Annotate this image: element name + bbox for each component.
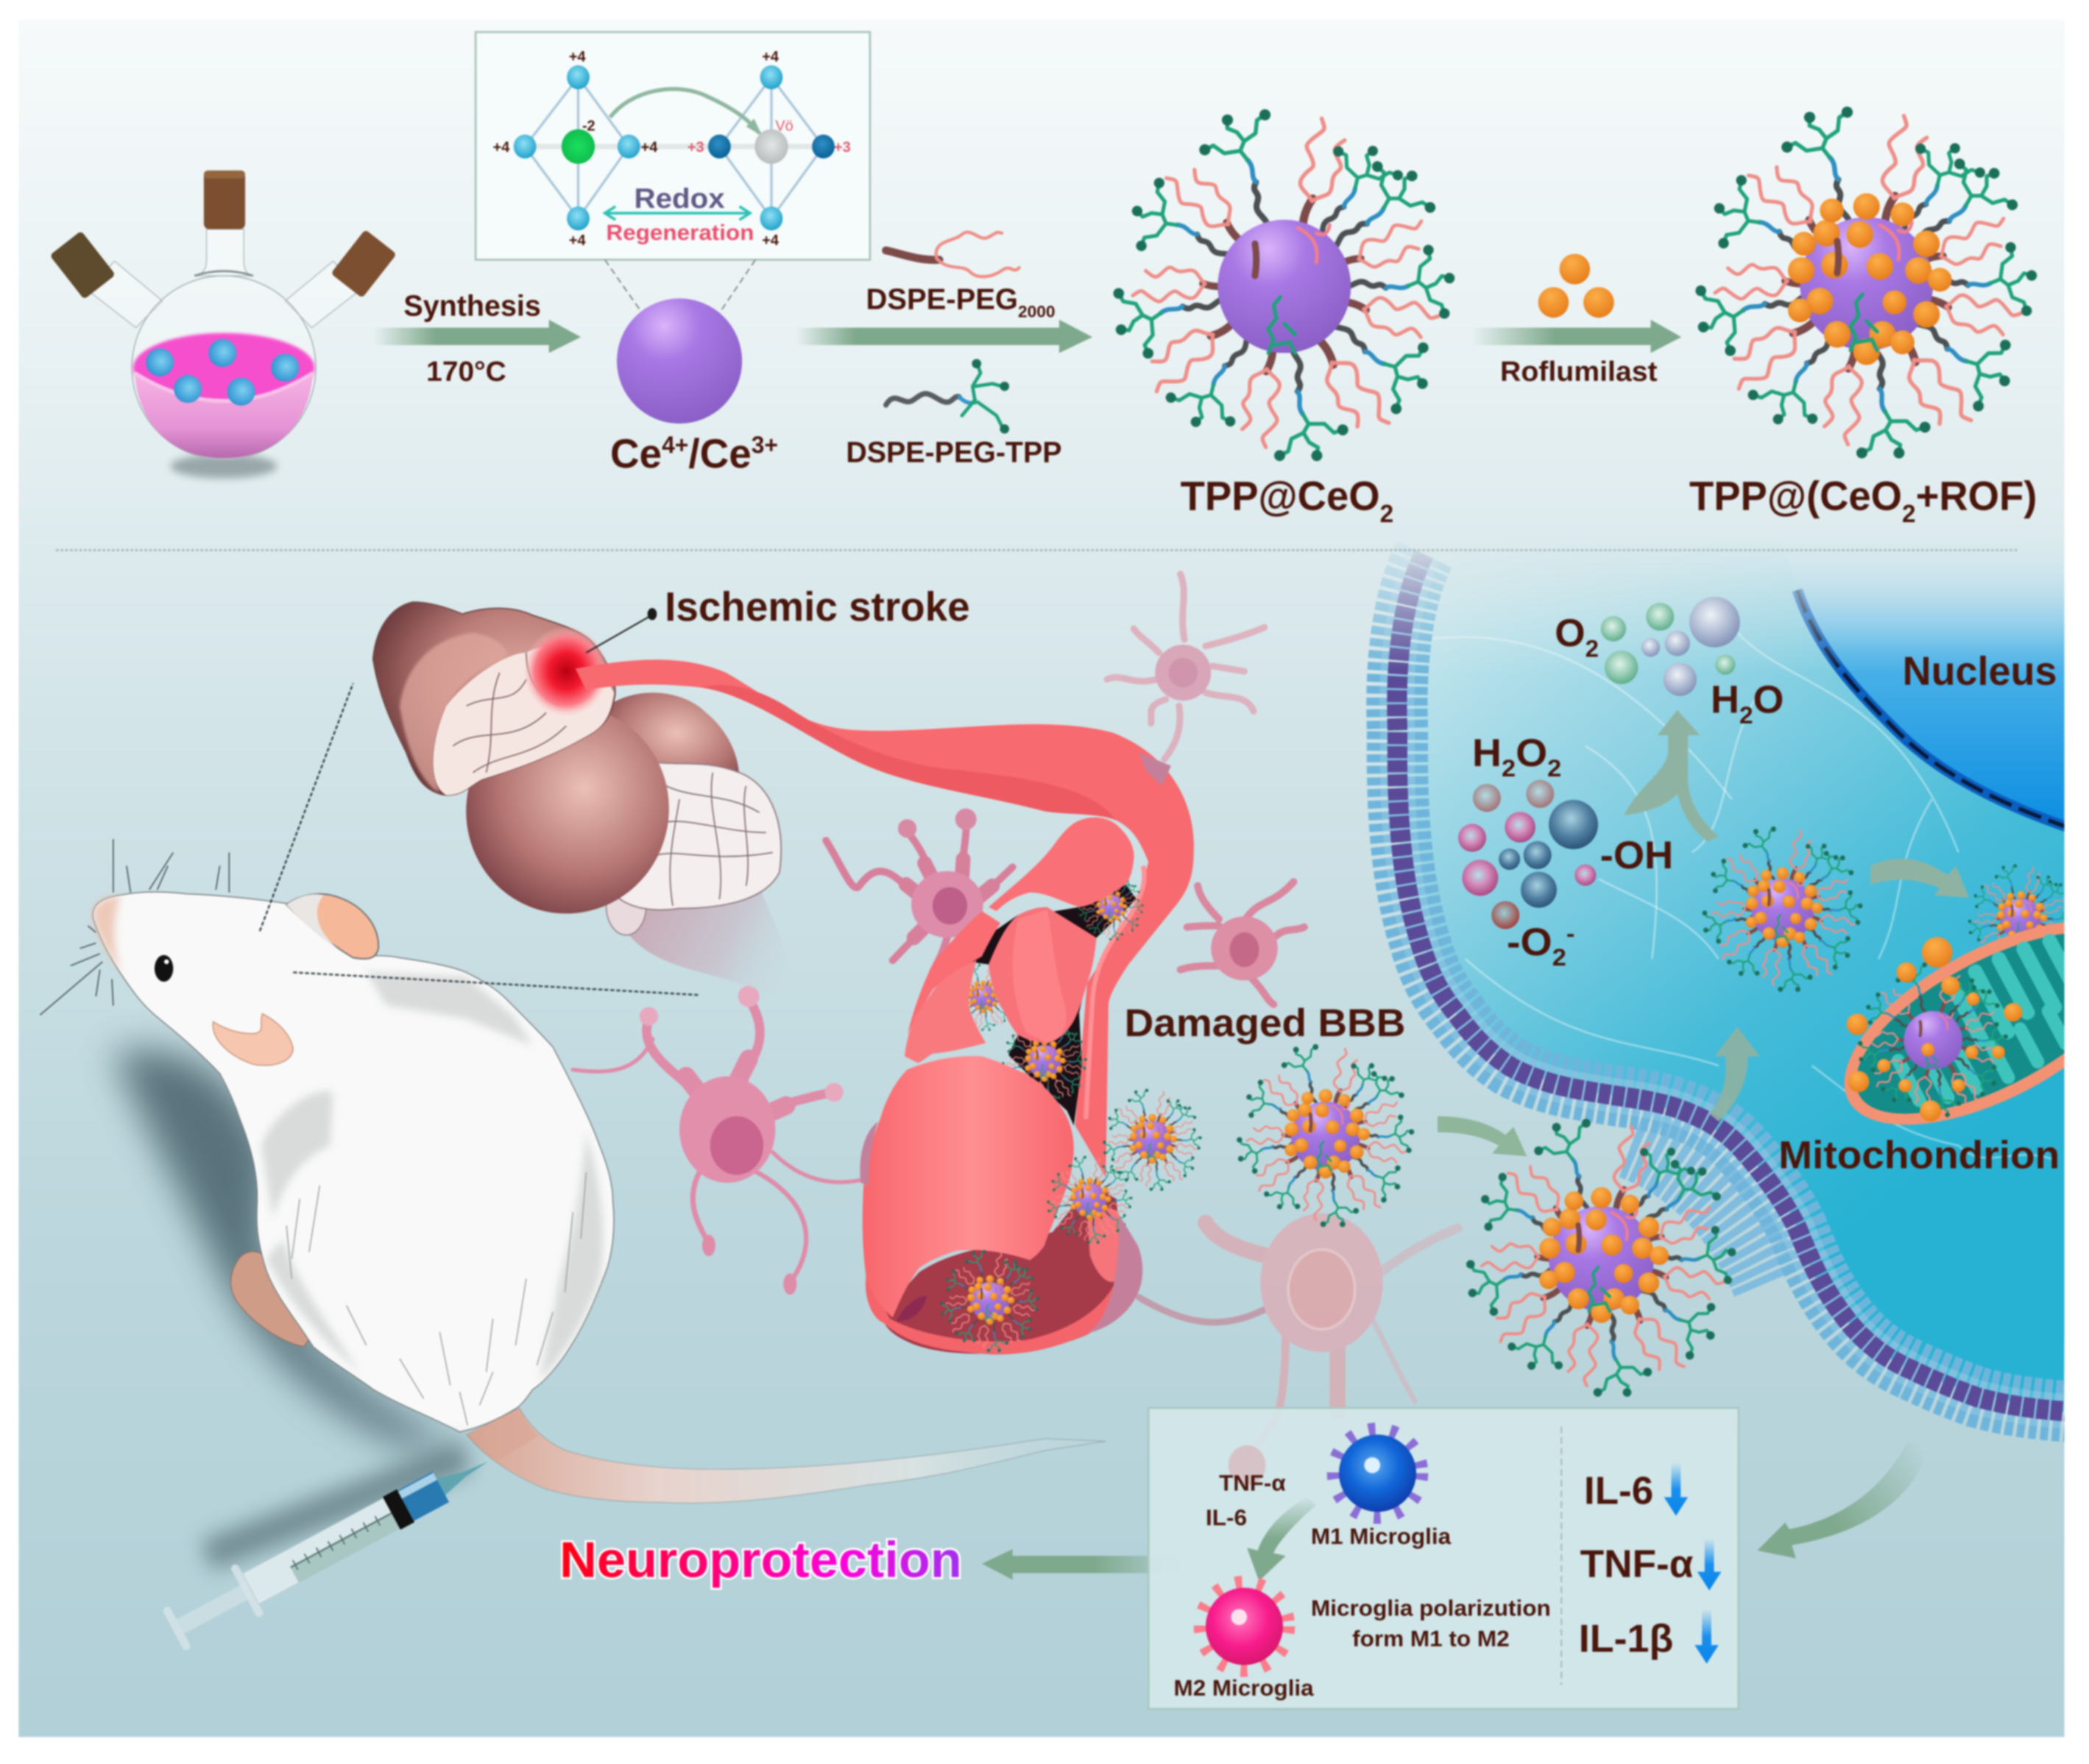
label: Synthesis: Synthesis <box>403 290 541 322</box>
upper plate <box>989 818 1134 911</box>
cortex white area <box>434 647 614 796</box>
arrow: M1 to M2 <box>1247 1497 1316 1581</box>
fur strokes <box>286 1172 586 1425</box>
cell E: large faded microglia <box>1139 1214 1457 1459</box>
nanoparticle: TPP@CeO2 <box>1106 102 1456 468</box>
label: DSPE-PEG2000: 2000 <box>1018 302 1055 321</box>
molecules: reactive oxygen species <box>1458 780 1598 929</box>
label: TPP@CeO2: 2 <box>1380 500 1393 528</box>
label: TPP@(CeO2+ROF): 2 <box>1902 500 1916 528</box>
arrow: up into cytosol <box>1709 1027 1760 1122</box>
eye <box>155 955 173 982</box>
astrocyte feet <box>860 753 1171 1333</box>
label: H2O2: 2 <box>1502 755 1516 782</box>
cell C: faded microglia <box>1107 574 1265 759</box>
flask with nanoparticles <box>49 171 397 478</box>
inset panel: redox: +4 <box>641 139 657 155</box>
lumen fold <box>897 1296 927 1322</box>
brainstem <box>613 852 796 993</box>
inset panel: redox: +3 <box>688 139 704 155</box>
icon: DSPE-PEG2000 <box>886 232 1019 277</box>
panel: microglia polarization <box>1148 1408 1739 1709</box>
small particles in gaps <box>950 963 1016 1032</box>
arrow: TNF-α down <box>1697 1539 1721 1590</box>
label: M1 Microglia: M1 Microglia <box>1311 1523 1452 1549</box>
arrow: ROS to O2/H2O <box>1624 710 1719 842</box>
fur shade <box>261 972 603 1381</box>
label: TNF-α: TNF-α <box>1580 1542 1693 1586</box>
label: Neuroprotection: Neuroprotection <box>559 1531 962 1588</box>
rat shadow <box>113 1049 459 1452</box>
label: H2O2: H <box>1472 732 1500 775</box>
cerebellum bulb <box>607 876 646 935</box>
nanoparticle: by mitochondrion <box>1967 863 2065 944</box>
arrow: roflumilast <box>1471 319 1681 353</box>
nose <box>93 895 123 975</box>
syringe <box>159 1436 502 1657</box>
rat <box>40 839 1106 1503</box>
label: -O2-: -O <box>1507 921 1549 964</box>
faded cell process over panel <box>1229 1445 1265 1485</box>
zoom line: top <box>260 684 353 931</box>
lower band <box>699 685 1117 821</box>
arrow: into membrane <box>1438 1116 1527 1156</box>
label: Damaged BBB: Damaged BBB <box>1125 1002 1405 1045</box>
callout line: ischemic stroke <box>586 608 657 653</box>
icon: DSPE-PEG-TPP <box>886 359 1009 433</box>
roflumilast molecules <box>1538 254 1614 318</box>
label: 170C: 170°C <box>426 357 506 388</box>
ear <box>286 894 378 959</box>
particle in lumen <box>939 1247 1039 1354</box>
particle at breach <box>1045 1154 1133 1246</box>
label: Ce4+/Ce3+: 4+ <box>662 431 688 458</box>
label: -O2-: - <box>1566 921 1574 947</box>
divider <box>56 550 2018 551</box>
arrow: PEG assembly <box>796 319 1092 353</box>
inset panel: redox: +4 <box>762 233 779 249</box>
molecules: O2 and H2O <box>1601 597 1740 696</box>
label: DSPE-PEG2000: DSPE-PEG <box>866 283 1017 316</box>
inset panel: redox: -2 <box>582 118 595 134</box>
label: polarization caption: Microglia polarizution <box>1311 1595 1551 1621</box>
body <box>93 892 614 1432</box>
label: Ce4+/Ce3+: /Ce <box>688 430 752 476</box>
outer rim <box>866 1265 1122 1355</box>
brain <box>373 602 796 993</box>
cell interior and membrane <box>1396 533 2071 1412</box>
label: IL-1β: IL-1β <box>1579 1617 1673 1660</box>
arrow: to neuroprotection <box>982 1549 1184 1580</box>
cerebrum big <box>443 684 692 936</box>
inset panel: redox: +4 <box>569 233 586 249</box>
arrow: synthesis <box>373 319 581 353</box>
label: TPP@(CeO2+ROF): TPP@(CeO <box>1689 472 1909 519</box>
rear lobe <box>599 693 740 799</box>
front paw <box>213 1013 293 1066</box>
inset panel: redox <box>476 32 870 260</box>
CeO2 sphere <box>617 298 742 424</box>
label: Roflumilast: Roflumilast <box>1500 357 1658 388</box>
arrow: cell to cytokines <box>1757 1441 1929 1559</box>
dark gaps <box>969 885 1137 1125</box>
cerebellum <box>613 762 781 910</box>
lumen <box>883 1186 1122 1354</box>
label: TPP@CeO2: TPP@CeO <box>1181 472 1386 519</box>
stroke lesion <box>523 626 609 717</box>
whiskers <box>40 839 229 1015</box>
icon: M2 microglia <box>1202 1584 1287 1669</box>
arrow: towards mitochondrion <box>1870 859 1969 898</box>
cell B: microglia <box>826 809 1013 972</box>
label: M2 Microglia: M2 Microglia <box>1174 1675 1315 1701</box>
inset panel: redox: Vö <box>775 118 793 134</box>
nanoparticle: small outside vessel <box>1100 1086 1202 1193</box>
right stub <box>1087 1208 1119 1282</box>
nanoparticle: damaged BBB <box>1233 1040 1415 1230</box>
label: H2O2: 2 <box>1547 755 1561 782</box>
label: Ce4+/Ce3+: 3+ <box>752 431 778 458</box>
tail base <box>466 1408 538 1462</box>
label: O2: 2 <box>1586 635 1599 662</box>
left upper plate <box>908 911 1000 1035</box>
label: IL-6: IL-6 <box>1584 1469 1653 1512</box>
label: H2O: 2 <box>1739 702 1753 729</box>
left plate <box>905 960 986 1063</box>
label: TPP@(CeO2+ROF): +ROF) <box>1916 472 2037 519</box>
tail <box>466 1408 1106 1503</box>
cell A: microglia <box>573 985 866 1294</box>
left lobe highlight <box>400 633 506 793</box>
feeding vessel and bend <box>576 659 1194 1177</box>
label: Mitochondrion: Mitochondrion <box>1778 1133 2060 1177</box>
zoom lines <box>605 260 755 313</box>
label: -O2-: 2 <box>1552 944 1566 971</box>
inset panel: redox: Regeneration <box>607 221 754 245</box>
syringe shadow <box>207 1456 466 1556</box>
label: Nucleus: Nucleus <box>1903 648 2057 693</box>
inset panel: redox: +4 <box>493 139 509 155</box>
label: -OH: -OH <box>1600 834 1673 877</box>
label: H2O: H <box>1711 678 1739 721</box>
upper lobe <box>373 602 615 796</box>
cylinder <box>863 1056 1074 1317</box>
label: polarization caption: form M1 to M2 <box>1352 1626 1510 1651</box>
inset panel: redox: +3 <box>834 139 851 155</box>
inset panel: redox: +4 <box>762 49 779 65</box>
inset panel: redox: +4 <box>569 49 586 65</box>
label: O2: O <box>1555 612 1585 655</box>
label: TNF-α small: TNF-α <box>1219 1470 1286 1495</box>
central plate <box>989 907 1097 1043</box>
nanoparticle: crossing membrane <box>1460 1113 1737 1403</box>
zoom line: side <box>293 972 699 995</box>
label: Ce4+/Ce3+: Ce <box>610 430 663 476</box>
arrow: IL-1β down <box>1694 1609 1719 1664</box>
mitochondrion <box>1843 921 2065 1126</box>
icon: M1 microglia <box>1335 1431 1420 1516</box>
label: H2O: O <box>1753 678 1784 721</box>
strip highlight <box>1086 866 1145 1119</box>
label: H2O2: O <box>1516 732 1547 775</box>
label: DSPE-PEG-TPP: DSPE-PEG-TPP <box>846 436 1062 469</box>
blood vessel <box>576 659 1194 1355</box>
inset panel: redox: Redox <box>635 183 725 214</box>
label: IL-6 small: IL-6 <box>1206 1504 1247 1530</box>
arrow: IL-6 down <box>1664 1462 1688 1516</box>
hind foot <box>231 1252 314 1347</box>
nanoparticle: TPP@(CeO2+ROF) <box>1688 99 2038 466</box>
label: Ischemic stroke: Ischemic stroke <box>665 583 970 629</box>
cell D: microglia <box>1181 882 1304 1005</box>
nanoparticle: cytosol <box>1699 823 1863 995</box>
